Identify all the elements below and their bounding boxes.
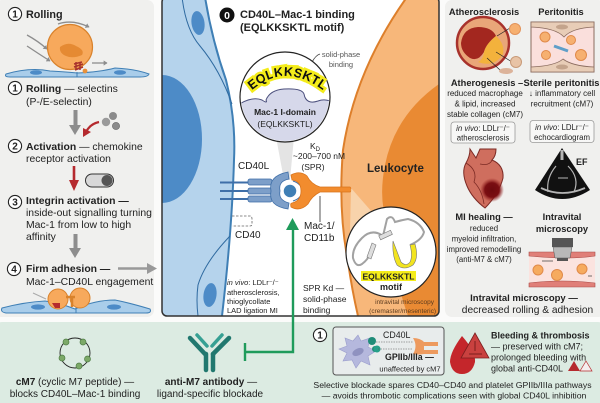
text: integrin activation: Integrin activation — xyxy=(26,196,129,207)
arrow: to central panel xyxy=(118,263,157,274)
step heading: rolling: Rolling xyxy=(26,9,63,21)
text: bleeding and thrombosis: Bleeding & thrombosis xyxy=(491,330,590,340)
label: KD value: K xyxy=(310,141,316,151)
text: SPR Kd: solid-phase xyxy=(303,294,347,304)
title: CD40L–Mac-1 binding: 0 xyxy=(224,10,230,22)
text: atherogenesis: stable collagen (cM7) xyxy=(447,110,523,119)
text: intravital microscopy note: intravital microscopy xyxy=(375,299,435,306)
text: MI healing: myeloid infiltration, xyxy=(452,234,516,244)
text: sterile peritonitis: recruitment (cM7) xyxy=(531,100,594,108)
text: integrin activation: 3 xyxy=(12,198,18,209)
zoom circle: EQLKKSKTL motif: EQLKKSKTL xyxy=(363,272,414,282)
text: MI healing: (anti-M7 & cM7) xyxy=(456,255,512,264)
receptor: Mac-1 xyxy=(291,173,352,222)
illustration: echocardiogram: EF xyxy=(576,157,588,167)
text: SPR Kd xyxy=(303,283,347,315)
box: in vivo atherosclerosis: atherosclerosis xyxy=(457,134,509,142)
text: in vivo models: atherosclerosis, xyxy=(227,288,280,297)
text: sterile peritonitis xyxy=(524,78,599,108)
leukocyte cell: orange membrane xyxy=(341,0,439,316)
label: solid-phase binding: solid-phase xyxy=(322,50,360,59)
illustration: rolling leukocyte xyxy=(6,22,149,77)
step heading: rolling: 1 xyxy=(12,10,18,21)
text: activation xyxy=(8,139,143,165)
label: CD40L: CD40L xyxy=(238,161,270,172)
platelet cell: blue membrane xyxy=(162,0,236,316)
icon: anti-M7 antibody xyxy=(190,335,229,370)
box: platelet GPIIb/IIIa: CD40L xyxy=(383,330,410,340)
label: CD40 dashed receptor: CD40 xyxy=(235,230,261,241)
arrow: rolling to activation xyxy=(69,110,81,135)
arrow: activation to integrin xyxy=(69,166,79,191)
text: firm adhesion: 4 xyxy=(11,265,17,276)
text: rolling selectins: Rolling — selectins xyxy=(26,84,118,95)
text: in vivo models xyxy=(227,278,280,315)
text: rolling selectins: 1 xyxy=(12,84,18,95)
text: in vivo models: in vivo: LDLr⁻/⁻ xyxy=(227,278,279,287)
label: KD value: (SPR) xyxy=(301,162,325,172)
label: Mac-1/CD11b: Mac-1/ xyxy=(304,221,335,232)
illustration: echocardiogram xyxy=(535,148,590,199)
text: sterile peritonitis: ↓ inflammatory cell xyxy=(529,89,595,98)
label: leukocyte: Leukocyte xyxy=(367,163,424,175)
zoom circle: Mac-1 I-domain: Mac-1 I-domain xyxy=(254,107,316,117)
title: CD40L–Mac-1 binding: CD40L–Mac-1 binding xyxy=(240,9,355,21)
text: SPR Kd: binding xyxy=(303,305,331,315)
number badge xyxy=(313,328,327,342)
text: anti-M7 antibody: ligand-specific blockade xyxy=(157,389,264,400)
panel: therapeutic strategies xyxy=(0,218,600,403)
icon: blood drop and warning xyxy=(450,333,489,374)
icon: cyclic M7 peptide xyxy=(59,338,90,369)
zoom circle: Mac-1 I-domain: EQLKKSKTL xyxy=(244,64,328,94)
label: CD40 dashed receptor xyxy=(232,216,261,241)
text: selective blockade xyxy=(313,380,592,400)
zoom circle: Mac-1 I-domain xyxy=(239,51,331,143)
text: activation: receptor activation xyxy=(26,154,111,165)
text: sterile peritonitis: Sterile peritonitis xyxy=(524,78,599,88)
label: Mac-1/CD11b: CD11b xyxy=(304,233,335,244)
text: atherogenesis: & lipid, increased xyxy=(455,100,515,108)
text: cM7 xyxy=(10,377,140,400)
text: intravital microscopy note: (cremaster/mesenteric) xyxy=(369,308,436,315)
text: bleeding and thrombosis: — preserved with cM7; xyxy=(491,342,583,352)
text: bleeding and thrombosis: global anti-CD40L xyxy=(491,364,563,374)
text: in vivo models: LAD ligation MI xyxy=(227,306,278,315)
text: firm adhesion: Mac-1–CD40L engagement xyxy=(26,277,153,288)
text: anti-M7 antibody xyxy=(157,377,264,400)
title: CD40L–Mac-1 binding: (EQLKKSKTL motif) xyxy=(240,22,345,34)
text: atherogenesis: reduced macrophage xyxy=(447,89,523,98)
text: rolling selectins xyxy=(8,81,118,108)
text: MI healing: reduced xyxy=(470,224,498,233)
border xyxy=(162,0,439,316)
text: intravital conclusion: decreased rolling & adhesion xyxy=(462,305,593,316)
text: firm adhesion xyxy=(7,262,153,288)
text: anti-M7 antibody: anti-M7 antibody — xyxy=(165,377,257,388)
text: intravital conclusion xyxy=(462,293,593,316)
text: intravital conclusion: Intravital microscopy — xyxy=(470,293,578,304)
box: platelet GPIIb/IIIa: unaffected by cM7 xyxy=(379,364,441,374)
icon: warning triangles xyxy=(568,361,592,371)
zoom circle: EQLKKSKTL motif: motif xyxy=(380,282,403,292)
inhibition arrow xyxy=(245,218,299,361)
text: MI healing: improved remodelling xyxy=(447,245,521,254)
box: platelet GPIIb/IIIa: GPIIb/IIIa — xyxy=(385,352,434,362)
text: activation: 2 xyxy=(12,142,18,153)
heading: atherosclerosis: Atherosclerosis xyxy=(449,7,519,17)
label: KD value: ~200–700 nM xyxy=(293,151,345,161)
step heading: rolling xyxy=(8,7,63,21)
heading: intravital microscopy: microscopy xyxy=(536,224,589,234)
illustration: firm adhesion cells xyxy=(2,288,150,313)
heading: peritonitis: Peritonitis xyxy=(538,7,584,17)
label: KD value xyxy=(293,141,345,172)
zoom circle: Mac-1 I-domain: (EQLKKSKTL) xyxy=(257,119,313,129)
text: integrin activation xyxy=(8,195,152,243)
heading: intravital microscopy xyxy=(536,212,589,234)
text: bleeding and thrombosis: prolonged bleeding with xyxy=(491,352,586,362)
text: intravital microscopy note xyxy=(369,299,436,315)
illustration: peritoneal vessel xyxy=(531,22,594,72)
label: solid-phase binding xyxy=(300,50,360,88)
text: integrin activation: Mac-1 from low to high xyxy=(26,220,131,231)
zoom circle: EQLKKSKTL motif xyxy=(346,207,436,297)
text: selective blockade: Selective blockade spares CD40–CD40 and platelet GPIIb/IIIa pathways xyxy=(313,380,592,390)
text: SPR Kd: SPR Kd — xyxy=(303,283,345,293)
label: KD value: D xyxy=(316,147,321,153)
text: selective blockade: — avoids thrombotic complications seen with global CD40L inhibition xyxy=(322,390,587,400)
text: integrin activation: inside-out signalling turning xyxy=(26,208,152,219)
text: integrin activation: affinity xyxy=(26,232,57,243)
box: in vivo echocardiogram xyxy=(530,120,594,142)
box: in vivo echocardiogram: echocardiogram xyxy=(534,133,590,142)
label: solid-phase binding: binding xyxy=(329,60,353,69)
box: platelet GPIIb/IIIa xyxy=(333,327,444,375)
text: activation: Activation — chemokine xyxy=(26,142,143,153)
wedge: zoom from binding site xyxy=(276,137,294,180)
box: in vivo atherosclerosis xyxy=(451,122,515,143)
text: firm adhesion: Firm adhesion — xyxy=(26,264,111,275)
text: atherogenesis xyxy=(447,78,523,119)
text: MI healing: MI healing — xyxy=(455,212,513,222)
receptor: CD40L trimer xyxy=(220,172,302,209)
text: in vivo models: thioglycollate xyxy=(227,297,270,306)
panel: disease models xyxy=(445,0,600,317)
text: bleeding and thrombosis xyxy=(491,330,590,374)
icon: chemokine particles and red arrow xyxy=(83,112,120,137)
text: rolling selectins: (P-/E-selectin) xyxy=(26,97,92,108)
text: cM7: cM7 (cyclic M7 peptide) — xyxy=(16,377,134,388)
icon: toggle switch xyxy=(86,174,114,187)
box: in vivo atherosclerosis: in vivo: LDLr⁻/⁻ xyxy=(456,124,510,133)
arrow: integrin to firm adhesion xyxy=(69,234,81,258)
illustration: heart with infarct xyxy=(464,149,504,208)
text: atherogenesis: Atherogenesis – xyxy=(451,78,523,88)
text: MI healing xyxy=(447,212,521,264)
heading: intravital microscopy: Intravital xyxy=(543,212,581,222)
illustration: artery cross-section xyxy=(457,17,522,74)
wedge: zoom to motif xyxy=(350,188,372,232)
box: in vivo echocardiogram: in vivo: LDLr⁻/⁻ xyxy=(535,123,589,132)
text: cM7: blocks CD40L–Mac-1 binding xyxy=(10,389,140,400)
panel: leukocyte adhesion cascade xyxy=(0,0,157,317)
number badge: 1 xyxy=(317,331,323,342)
title: CD40L–Mac-1 binding xyxy=(220,8,355,34)
label: Mac-1/CD11b xyxy=(304,221,335,244)
panel: CD40L–Mac-1 binding xyxy=(161,0,440,317)
illustration: microscope over vessel xyxy=(529,238,595,287)
